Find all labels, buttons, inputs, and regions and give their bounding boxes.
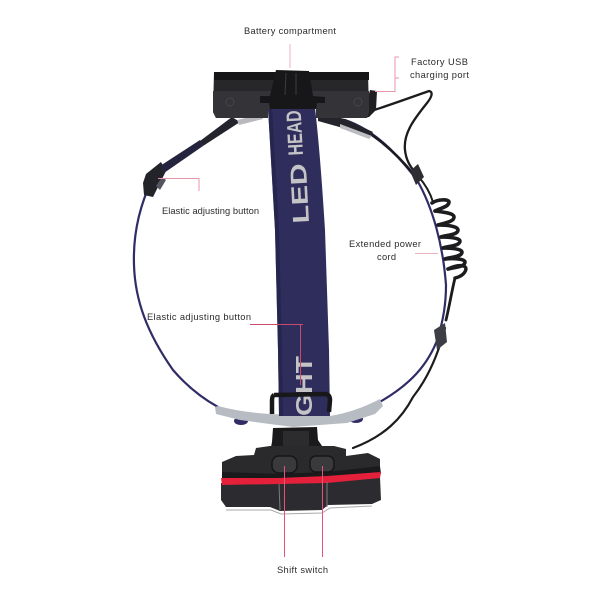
- strap buckle: [272, 394, 330, 414]
- label: battery compartment: Battery compartment: [244, 26, 336, 36]
- battery compartment: [213, 70, 369, 118]
- top housing: [222, 446, 380, 479]
- label: factory USB charging port: charging port: [410, 70, 469, 80]
- strap lettering: LED: LED: [285, 163, 314, 224]
- charging port plug: [362, 90, 377, 118]
- lens edge: [226, 506, 372, 514]
- headlamp body: [221, 446, 381, 514]
- grey mounting plate: [215, 399, 383, 427]
- headband loop: [134, 120, 446, 407]
- head strap: [268, 108, 330, 416]
- red stripe: [221, 472, 381, 485]
- leader lines: [158, 44, 438, 557]
- power cord with coil: [353, 91, 466, 448]
- label: extended power cord: Extended power: [349, 239, 421, 249]
- label: shift switch: Shift switch: [277, 565, 328, 575]
- label: extended power cord: [349, 239, 421, 262]
- label: elastic adjusting button, lower: Elastic adjusting button: [147, 312, 251, 322]
- connector slides near battery: [200, 113, 373, 146]
- battery clip: [260, 70, 325, 109]
- label: extended power cord: cord: [377, 252, 396, 262]
- elastic adjusting button: left: [143, 140, 203, 197]
- elastic adjusting button: right: [410, 164, 447, 350]
- lamp hinge bracket: [270, 427, 322, 452]
- lower housing: [221, 477, 381, 511]
- strap rear bumps: [234, 415, 363, 425]
- right switch: [310, 456, 334, 472]
- strap lettering: HEAD: HEAD: [283, 110, 308, 156]
- left switch: [272, 456, 297, 473]
- label: elastic adjusting button, upper: Elastic adjusting button: [162, 206, 259, 216]
- label: factory USB charging port: Factory USB: [411, 57, 468, 67]
- label: factory USB charging port: [410, 57, 469, 80]
- strap lettering: GHT: GHT: [291, 356, 317, 416]
